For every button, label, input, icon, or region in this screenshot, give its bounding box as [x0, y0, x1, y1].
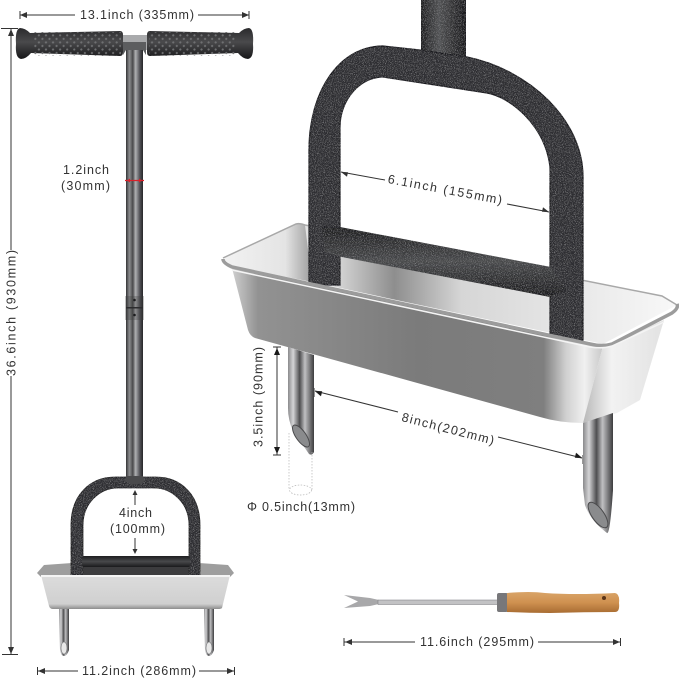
full tool illustration [16, 28, 253, 656]
large detail illustration [223, 0, 677, 533]
fork rod [378, 600, 498, 604]
small tray body [41, 575, 230, 609]
dimension: tray width small [37, 664, 234, 678]
tray right side [583, 320, 664, 423]
left grip [16, 28, 123, 59]
hole diameter guide [289, 433, 312, 495]
upright shaft [421, 0, 466, 70]
tray rim highlight [232, 270, 664, 348]
dimension: fork length: 11.6inch (295mm) [420, 635, 534, 649]
small right prong [204, 609, 214, 656]
dimension: shaft diameter [61, 163, 144, 193]
dimension: prong spacing: 8inch(202mm) [400, 410, 496, 448]
dimension: total height: 36.6inch (930mm) [4, 250, 18, 376]
wooden handle [507, 592, 619, 613]
dimension: prong length [252, 347, 281, 455]
small frame arch [71, 477, 200, 575]
dimension: prong length: 3.5inch (90mm) [252, 347, 266, 447]
dimension: tray width small: 11.2inch (286mm) [82, 664, 196, 678]
dimension: inner width large [341, 172, 549, 212]
tray interior back wall [305, 225, 677, 344]
dimension: shaft diameter: 1.2inch [63, 163, 109, 177]
right grip [147, 28, 253, 59]
small tray interior ends [37, 563, 234, 577]
right large prong [583, 413, 613, 533]
shaft joint [125, 296, 144, 320]
dimension: inner height: 4inch [119, 506, 152, 520]
back rim [223, 224, 677, 305]
label: hole diameter: Φ 0.5inch(13mm) [247, 500, 355, 514]
dimension: prong spacing [314, 388, 582, 464]
T connector [122, 35, 147, 55]
dimension: handle width: 13.1inch (335mm) [80, 8, 194, 22]
dimension: fork length [344, 635, 620, 649]
large crossbar [322, 226, 566, 297]
small tray rim highlight [41, 575, 230, 577]
ferrule [497, 593, 508, 612]
dimension: shaft diameter: (30mm) [61, 179, 110, 193]
shaft [126, 48, 143, 484]
tray rim [223, 259, 677, 346]
dimension: total height [1, 28, 18, 654]
small crossbar [82, 556, 190, 567]
handle hole [602, 596, 606, 600]
small back plate [83, 566, 189, 576]
tray front face [232, 268, 603, 423]
fork tines [344, 595, 379, 608]
dimension: inner width large: 6.1inch (155mm) [387, 172, 503, 207]
small left prong [59, 609, 69, 656]
shaft collar [125, 476, 145, 484]
dimension: inner height [110, 490, 165, 554]
weeding fork tool [344, 592, 619, 613]
dimension: handle width [20, 8, 249, 22]
tray interior left [223, 224, 312, 282]
left large prong [288, 347, 314, 455]
large arch frame [309, 46, 583, 340]
dimension: inner height: (100mm) [110, 522, 165, 536]
